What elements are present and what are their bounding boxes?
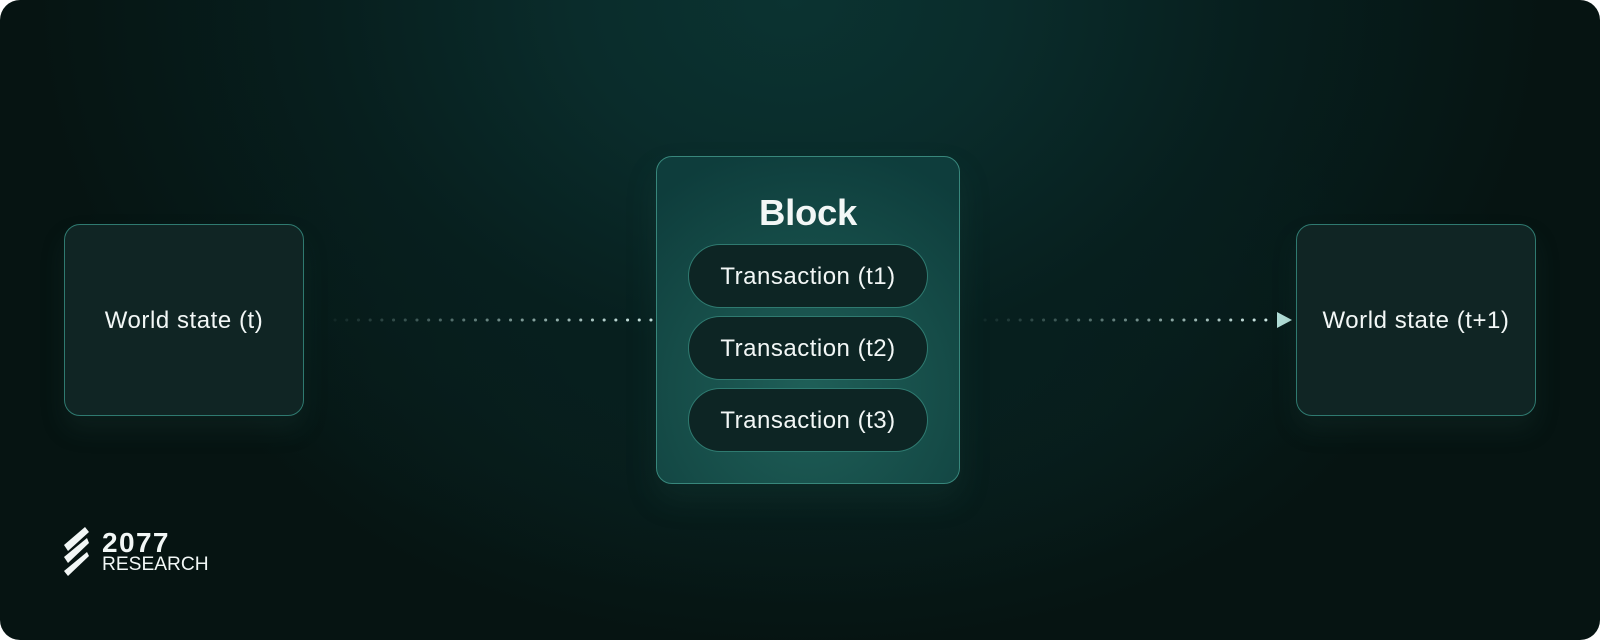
box: world state t+1 [1296, 224, 1536, 416]
logo text: 2077: 2077 [102, 527, 170, 558]
dotted arrow: world state t to block [334, 318, 652, 322]
pill: transaction t3 [688, 388, 928, 452]
heading: block: Block [759, 192, 857, 233]
box: world state t: World state (t) [105, 307, 263, 334]
box: world state t [64, 224, 304, 416]
pill: transaction t3: Transaction (t3) [720, 407, 896, 434]
pill: transaction t1: Transaction (t1) [720, 263, 896, 290]
pill: transaction t2 [688, 316, 928, 380]
pill: transaction t2: Transaction (t2) [720, 335, 896, 362]
logo text: research: RESEARCH [102, 554, 209, 575]
box: world state t+1: World state (t+1) [1322, 307, 1509, 334]
panel: block [656, 156, 960, 484]
icon: logo stripes [64, 527, 89, 576]
logo: 2077 research [64, 527, 209, 576]
pill: transaction t1 [688, 244, 928, 308]
dotted arrow: block to world state t+1 [984, 312, 1292, 328]
